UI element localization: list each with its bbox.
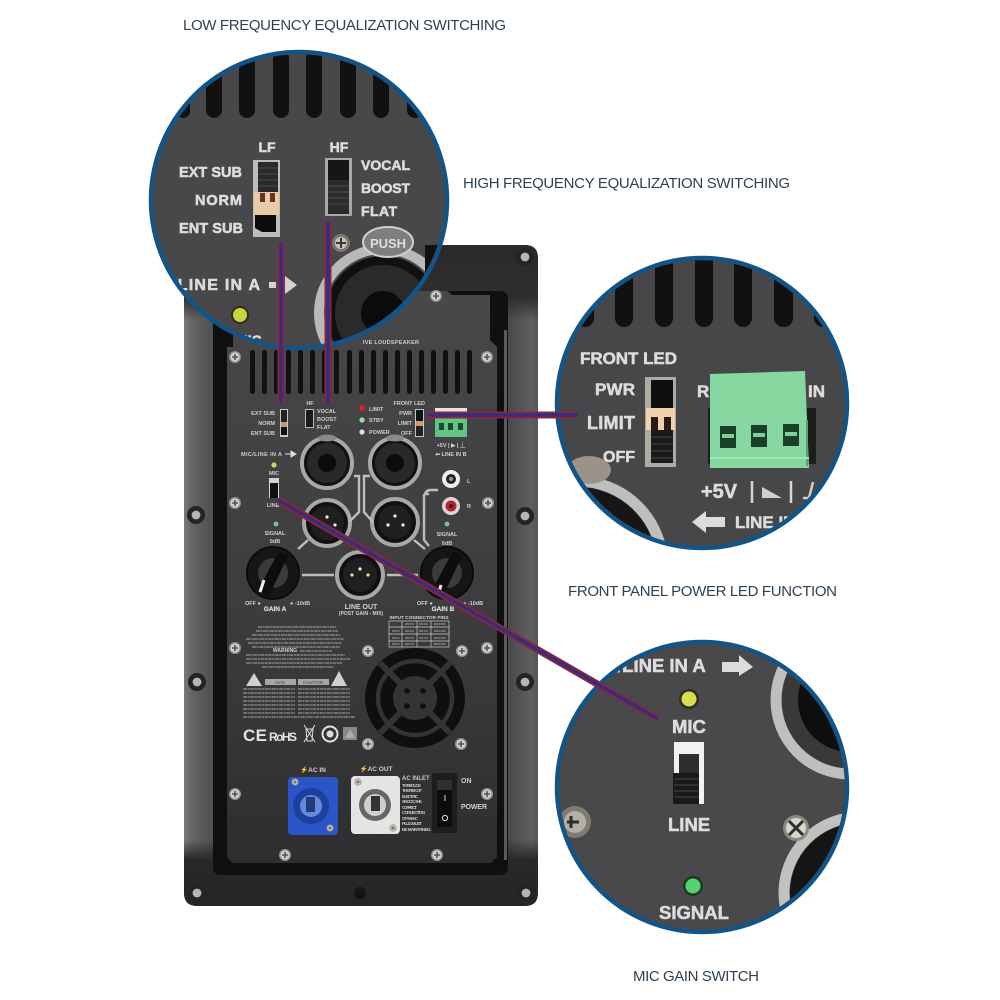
push latch: PUSH — [370, 236, 406, 251]
HF switch labels: VOCAL — [317, 409, 337, 415]
frame top band — [184, 245, 538, 320]
avis caution bars: AVIS — [275, 680, 285, 685]
LED option labels — [580, 349, 677, 466]
HF title: HF — [330, 139, 349, 155]
line in B labels: +5V | ▶ | ⏊ — [437, 441, 466, 449]
zoomed connector — [572, 456, 665, 541]
leader line: high frequency — [324, 222, 332, 403]
push latch — [363, 227, 413, 257]
LF slide switch — [253, 160, 280, 237]
zoomed vents — [176, 50, 423, 118]
signal labels: 0dB — [442, 541, 452, 547]
RCA left — [442, 470, 460, 488]
amplifier plate — [184, 245, 538, 906]
signal routing arrows — [298, 476, 438, 575]
RCA right — [442, 497, 460, 515]
LF switch labels: NORM — [258, 421, 275, 427]
LINE text: LINE IN B — [735, 513, 812, 532]
power labels: ON — [461, 778, 472, 785]
model text: IVE LOUDSPEAKER — [363, 340, 419, 346]
LF option labels — [179, 165, 243, 237]
front LED labels: OFF — [401, 431, 413, 437]
HF option labels — [361, 157, 410, 219]
mic line labels — [267, 471, 280, 509]
avis caution bars: CAUTION — [303, 680, 323, 685]
certification marks: RoHS — [269, 730, 297, 744]
LF switch labels: ENT SUB — [251, 431, 275, 437]
HF option labels: FLAT — [361, 203, 397, 219]
avis caution bars — [265, 679, 329, 685]
signal labels: SIGNAL — [265, 531, 286, 537]
ring — [557, 642, 847, 932]
left screw — [559, 806, 591, 838]
callout circle: mic gain switch — [554, 640, 850, 934]
small HF switch — [305, 409, 314, 428]
fan grille — [365, 648, 465, 748]
HF switch labels: BOOST — [317, 417, 337, 423]
status LEDs — [359, 405, 365, 435]
status labels — [369, 407, 390, 436]
ring — [151, 52, 447, 348]
HF slide switch — [325, 158, 352, 216]
AC inlet notice: CORRECT — [402, 805, 417, 810]
gain B knob — [421, 547, 473, 599]
front LED labels: LIMIT — [398, 421, 413, 427]
MIC label: MIC — [672, 716, 706, 737]
line out label — [339, 604, 383, 617]
certification marks: CE — [243, 726, 267, 745]
LED option labels: LIMIT — [587, 413, 635, 433]
SIGNAL label: SIGNAL — [659, 902, 729, 923]
XLR out A — [304, 500, 350, 546]
status labels: STBY — [369, 418, 384, 424]
LED slide switch — [645, 377, 676, 467]
left arrow — [692, 511, 725, 533]
power labels — [461, 778, 487, 811]
heading: low frequency label: LOW FREQUENCY EQUALIZATION SWITCHING — [183, 17, 506, 34]
MIC partial: MIC — [236, 332, 262, 348]
slide switch — [673, 742, 704, 804]
line out label: LINE OUT — [345, 604, 378, 611]
LF switch labels: EXT SUB — [251, 411, 275, 417]
gain A knob — [247, 547, 299, 599]
status labels: POWER — [369, 430, 390, 436]
vent slots — [250, 350, 472, 394]
circle background — [550, 250, 850, 550]
AC inlet notice: ELECTRIC — [402, 794, 419, 799]
lower right connector — [784, 817, 936, 969]
small LED switch — [415, 409, 424, 437]
white powercon — [351, 776, 400, 834]
RCA labels: L — [467, 479, 471, 485]
line out label: (POST GAIN - MIX) — [339, 611, 383, 617]
panel screws — [229, 290, 494, 861]
AC inlet notice: TO REDUCE — [402, 783, 421, 788]
R label: R — [697, 382, 709, 401]
AC labels: ⚡AC IN — [300, 766, 326, 774]
front LED labels — [394, 401, 425, 437]
zoomed vents — [582, 260, 823, 327]
HF option labels: VOCAL — [361, 157, 410, 173]
heading: front panel led label: FRONT PANEL POWER LED FUNCTION — [568, 583, 837, 600]
arrow — [285, 451, 296, 457]
right arrow — [722, 655, 753, 676]
circle background — [153, 54, 445, 330]
gain labels: ● -10dB — [290, 601, 310, 607]
warning text: WARNING — [273, 648, 297, 654]
XLR out B — [372, 499, 418, 545]
outer frame — [184, 245, 538, 906]
white arrow — [269, 276, 297, 294]
heading: mic gain label: MIC GAIN SWITCH — [633, 968, 759, 985]
pin labels: +5V — [701, 481, 738, 503]
front LED labels: FRONT LED — [394, 401, 425, 407]
gain titles: GAIN B — [432, 606, 455, 613]
HF switch labels — [317, 409, 337, 431]
AC inlet notice: CONNECTION — [402, 810, 425, 815]
combo jack B — [370, 434, 420, 488]
AC inlet notice: PLUG MUST — [402, 821, 422, 826]
pin labels — [701, 481, 818, 503]
screw by latch — [332, 234, 350, 252]
gain labels — [245, 601, 483, 607]
callout circle: low and high frequency switches — [150, 50, 455, 377]
LED option labels: FRONT LED — [580, 349, 677, 368]
warning text — [246, 627, 350, 667]
mic line labels: LINE — [267, 503, 280, 509]
frame bottom band — [184, 840, 538, 906]
signal labels: SIGNAL — [437, 532, 458, 538]
LF option labels: ENT SUB — [179, 221, 243, 237]
gain labels: OFF ● — [417, 601, 433, 607]
zoomed combo jack — [314, 247, 425, 344]
small terminal block — [435, 408, 467, 437]
line in B labels — [434, 441, 467, 458]
line in A text: /LINE IN A — [172, 277, 260, 294]
warning triangles — [246, 671, 347, 686]
frame mounting holes — [187, 248, 535, 902]
signal labels: 0dB — [270, 539, 280, 545]
callout circle: front panel power LED — [554, 256, 850, 550]
RCA labels — [467, 479, 471, 510]
power labels: POWER — [461, 804, 487, 811]
signal labels — [265, 531, 458, 547]
rocker power switch — [432, 773, 457, 833]
RCA labels: R — [467, 504, 471, 510]
dark upper-right recess — [425, 245, 438, 273]
AC labels — [300, 765, 393, 774]
recess — [213, 291, 508, 875]
terminal shadow — [708, 408, 816, 464]
circle background — [550, 640, 850, 940]
inner panel — [227, 291, 497, 863]
HF label: HF — [306, 401, 314, 407]
line in A text: /LINE IN A — [617, 655, 706, 676]
AC inlet notice: BE MAINTAINED. — [402, 827, 431, 832]
signal LEDs — [274, 522, 449, 526]
AC inlet notice: THE RISK OF — [402, 788, 422, 793]
gain titles — [264, 606, 455, 613]
blue powercon — [288, 777, 338, 835]
LF option labels: NORM — [195, 193, 242, 209]
IN label: IN — [808, 382, 825, 401]
caution text — [243, 689, 355, 717]
certification marks — [243, 725, 357, 745]
green terminal block — [710, 371, 809, 468]
LED option labels: OFF — [603, 449, 635, 466]
small LF switch — [280, 409, 288, 437]
AC inlet notice: SHOCK, THE — [402, 799, 422, 804]
heading: high frequency label: HIGH FREQUENCY EQUALIZATION SWITCHING — [463, 175, 790, 192]
AC inlet notice: AC INLET — [402, 776, 430, 782]
HF switch labels: FLAT — [317, 425, 331, 431]
input connector table: INPUT CONNECTOR PINS — [389, 615, 449, 621]
right screw — [783, 815, 809, 841]
LINE label: LINE — [668, 814, 710, 835]
gain titles: GAIN A — [264, 606, 287, 613]
leader line: low frequency — [278, 243, 284, 403]
leader line: front LED — [428, 412, 578, 418]
small mic switch — [269, 478, 279, 498]
top right combo jack — [776, 626, 924, 774]
mic line labels: MIC — [269, 471, 279, 477]
LF switch labels — [251, 411, 275, 437]
ring — [557, 258, 847, 548]
LED option labels: PWR — [595, 380, 635, 399]
input connector table — [389, 615, 449, 647]
green LED — [683, 876, 703, 896]
gain labels: OFF ● — [245, 601, 261, 607]
MIC LED — [271, 462, 277, 468]
combo jack A — [302, 434, 352, 488]
leader line: mic gain — [278, 500, 658, 719]
yellow LED — [231, 306, 249, 324]
AC inlet notice — [402, 776, 431, 832]
gain labels: ● -10dB — [463, 601, 483, 607]
line in B labels: ⬅ LINE IN B — [434, 452, 467, 458]
mic line in A label: MIC/LINE IN A — [241, 452, 282, 458]
status labels: LIMIT — [369, 407, 384, 413]
front LED labels: PWR — [399, 411, 412, 417]
yellow LED — [679, 689, 699, 709]
LF option labels: EXT SUB — [179, 165, 242, 181]
LF title: LF — [258, 139, 276, 155]
HF option labels: BOOST — [361, 180, 410, 196]
AC labels: ⚡AC OUT — [359, 765, 393, 773]
right recess highlight — [504, 330, 507, 860]
AC inlet notice: OF THE AC — [402, 816, 419, 821]
XLR line out — [337, 552, 383, 598]
